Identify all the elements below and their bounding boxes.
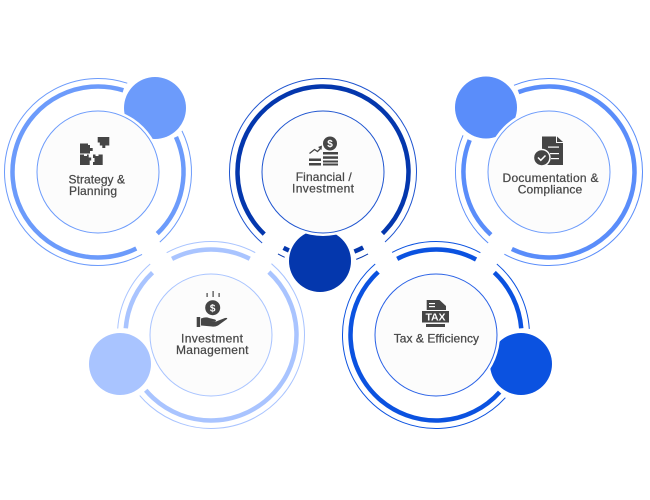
halo: financial bbox=[259, 108, 387, 236]
label: Documentation & Compliance: Documentation & bbox=[502, 171, 598, 185]
icon text: TAX: TAX bbox=[426, 312, 446, 324]
inner circle: financial bbox=[262, 111, 384, 233]
icon: puzzle pieces bbox=[80, 137, 109, 165]
label: Tax & Efficiency: Tax & Efficiency bbox=[394, 332, 479, 346]
outer rings: tax bbox=[304, 203, 568, 467]
label: Strategy & Planning: Planning bbox=[69, 184, 117, 198]
accent dot: investment management bbox=[89, 333, 151, 395]
label: Investment Management: Investment bbox=[181, 332, 244, 346]
icon: tax document bbox=[422, 300, 449, 327]
panel: Tax & Efficiency bbox=[304, 203, 568, 467]
panel: Strategy & Planning bbox=[0, 45, 225, 299]
accent dot: tax bbox=[490, 333, 552, 395]
label: Strategy & Planning: Strategy & bbox=[68, 172, 125, 186]
label: Investment Management bbox=[176, 332, 249, 357]
halo: strategy bbox=[34, 108, 162, 236]
label: Strategy & Planning bbox=[68, 172, 125, 198]
icon: hand holding coin bbox=[197, 291, 227, 327]
halo: documentation bbox=[485, 108, 613, 236]
icon text: dollar sign on hand coin: $ bbox=[210, 303, 216, 314]
label: Investment Management: Management bbox=[176, 343, 249, 357]
accent dot: documentation bbox=[455, 76, 517, 138]
accent dot: financial bbox=[289, 230, 351, 292]
panel: Financial / Investment bbox=[191, 40, 455, 304]
label: Documentation & Compliance: Compliance bbox=[518, 182, 583, 196]
panel: Investment Management bbox=[79, 203, 343, 467]
accent dot: strategy bbox=[124, 77, 186, 139]
label: Documentation & Compliance bbox=[502, 171, 598, 196]
label: Financial / Investment bbox=[292, 170, 355, 196]
inner circle: investment management bbox=[150, 274, 272, 396]
label: Financial / Investment: Financial / bbox=[296, 170, 352, 184]
inner circle: tax bbox=[375, 274, 497, 396]
icon text: dollar sign on coin: $ bbox=[327, 139, 333, 150]
panel: Documentation & Compliance bbox=[417, 40, 650, 304]
icon: coin stack and growth arrow bbox=[309, 136, 338, 166]
halo: tax bbox=[372, 271, 500, 399]
inner circle: documentation bbox=[488, 111, 610, 233]
label: Financial / Investment: Investment bbox=[292, 182, 355, 196]
outer rings: investment management bbox=[79, 203, 343, 467]
outer rings: financial bbox=[191, 40, 455, 304]
icon: document with check bbox=[533, 136, 563, 167]
outer rings: strategy bbox=[0, 45, 225, 299]
inner circle: strategy bbox=[37, 111, 159, 233]
outer rings: documentation bbox=[417, 40, 650, 304]
halo: investment management bbox=[147, 271, 275, 399]
